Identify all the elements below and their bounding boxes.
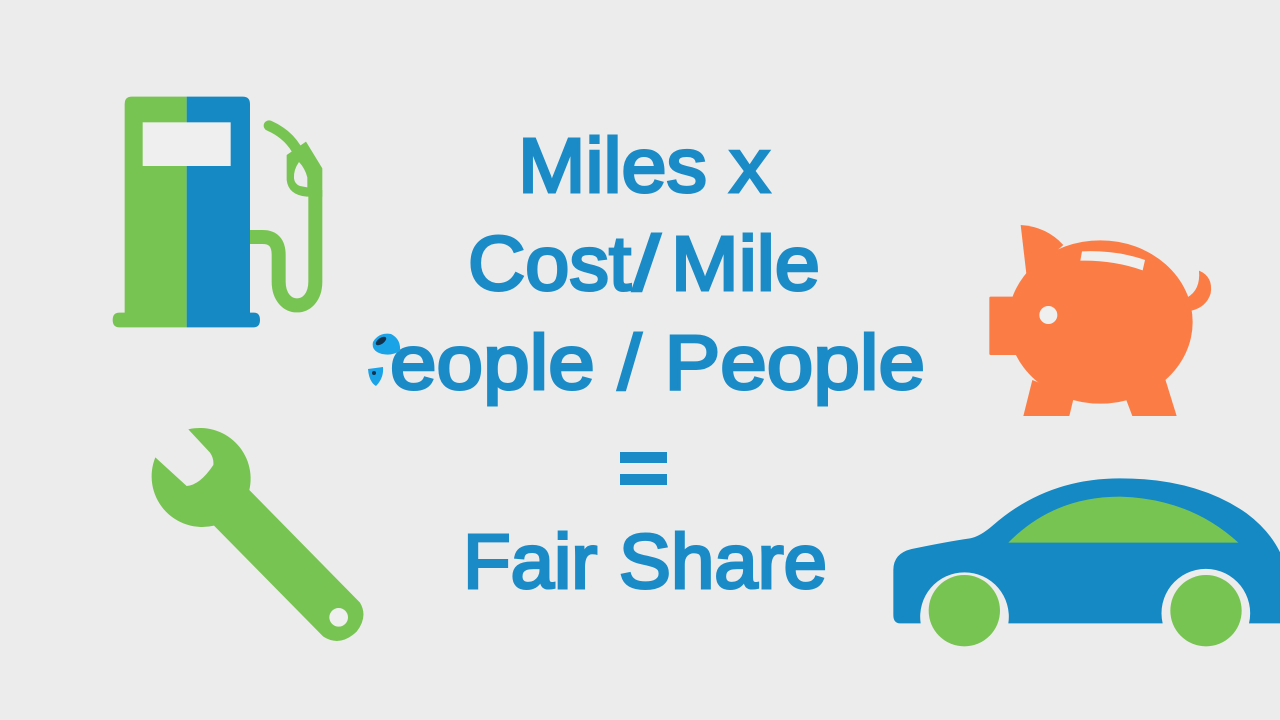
- icon: car: [893, 478, 1280, 646]
- text: Cost/Mile: Cost: [468, 221, 631, 307]
- text: Fair Share: Fair Share: [463, 519, 827, 605]
- front wheel: [929, 575, 1000, 646]
- glitch mark: broken letter P: [368, 334, 400, 386]
- text: Cost/Mile: [468, 221, 820, 307]
- text: Miles x: Miles x: [518, 123, 770, 209]
- text: eople / People: eople / People: [390, 320, 925, 406]
- icon: piggy bank: [989, 225, 1211, 416]
- icon: fuel pump: [113, 97, 322, 327]
- equals sign: [620, 452, 667, 485]
- icon: wrench: [152, 428, 363, 641]
- text: Cost/Mile: Mile: [671, 221, 820, 307]
- text: Cost/Mile: /: [633, 221, 661, 307]
- rear wheel: [1170, 575, 1242, 646]
- car window: [1008, 497, 1238, 543]
